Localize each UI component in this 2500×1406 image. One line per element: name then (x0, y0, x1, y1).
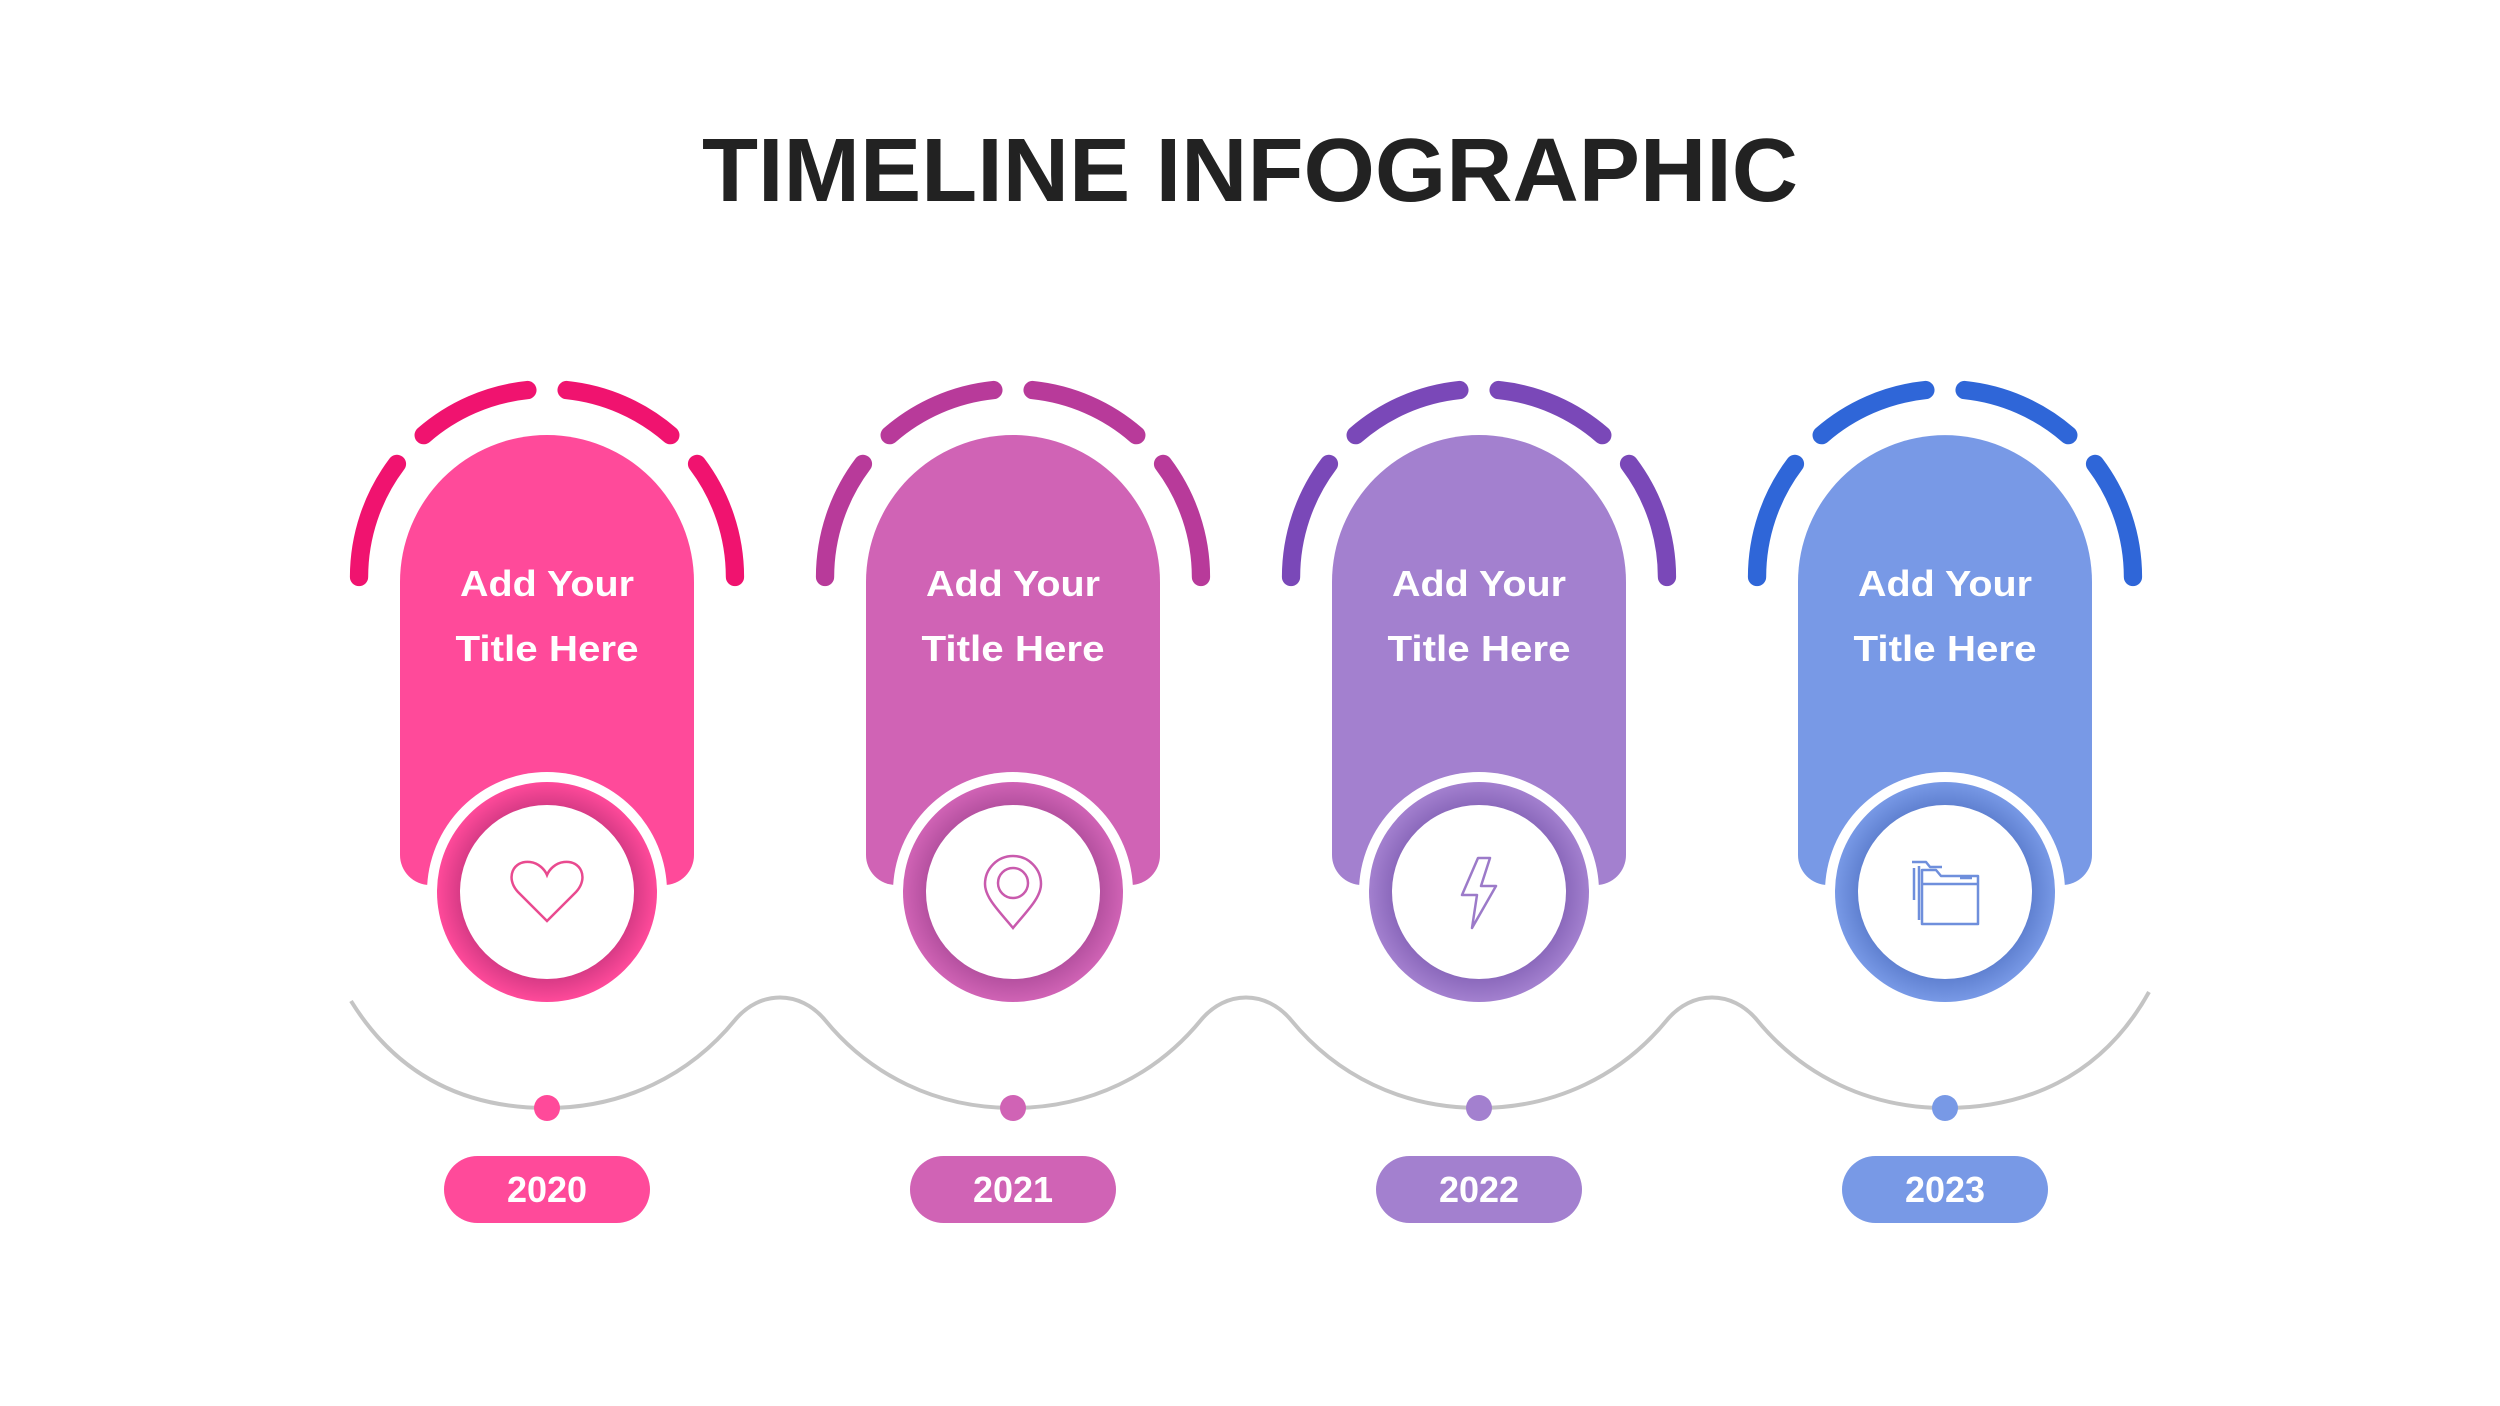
arcs 2020 (359, 390, 735, 577)
icon circle 2020 (427, 772, 667, 1012)
step 2021 (825, 390, 1201, 1223)
year pill 2022 (1376, 1156, 1582, 1223)
title: TIMELINE INFOGRAPHIC (702, 121, 1798, 221)
card title 2020: Add Your (460, 563, 634, 604)
year pill 2021 (910, 1156, 1116, 1223)
icon: lightning (1462, 858, 1496, 928)
card title 2023: Title Here (1854, 628, 2036, 669)
card title 2021 (922, 563, 1104, 669)
card title 2023: Add Your (1858, 563, 2032, 604)
card title 2022: Title Here (1388, 628, 1570, 669)
card title 2023 (1854, 563, 2036, 669)
step 2023 (1757, 390, 2133, 1223)
icon: location pin (985, 856, 1041, 928)
dot 2022 (1466, 1095, 1492, 1121)
card 2022 (1332, 435, 1626, 885)
year pill 2020: 2020 (507, 1169, 587, 1210)
icon circle 2022 (1359, 772, 1599, 1012)
year pill 2023: 2023 (1905, 1169, 1985, 1210)
card title 2022 (1388, 563, 1570, 669)
step 2020 (359, 390, 735, 1223)
icon: heart (512, 862, 582, 921)
dot 2020 (534, 1095, 560, 1121)
card title 2020 (456, 563, 638, 669)
wave line (351, 992, 2149, 1108)
card 2020 (400, 435, 694, 885)
year pill 2023 (1842, 1156, 2048, 1223)
arcs 2023 (1757, 390, 2133, 577)
icon circle 2021 (893, 772, 1133, 1012)
arcs 2021 (825, 390, 1201, 577)
year pill 2021: 2021 (973, 1169, 1053, 1210)
card 2021 (866, 435, 1160, 885)
icon circle 2023 (1825, 772, 2065, 1012)
card title 2021: Title Here (922, 628, 1104, 669)
card title 2022: Add Your (1392, 563, 1566, 604)
dot 2023 (1932, 1095, 1958, 1121)
dot 2021 (1000, 1095, 1026, 1121)
year pill 2022: 2022 (1439, 1169, 1519, 1210)
icon: folders (1912, 862, 1978, 924)
step 2022 (1291, 390, 1667, 1223)
year pill 2020 (444, 1156, 650, 1223)
card title 2021: Add Your (926, 563, 1100, 604)
card 2023 (1798, 435, 2092, 885)
arcs 2022 (1291, 390, 1667, 577)
card title 2020: Title Here (456, 628, 638, 669)
